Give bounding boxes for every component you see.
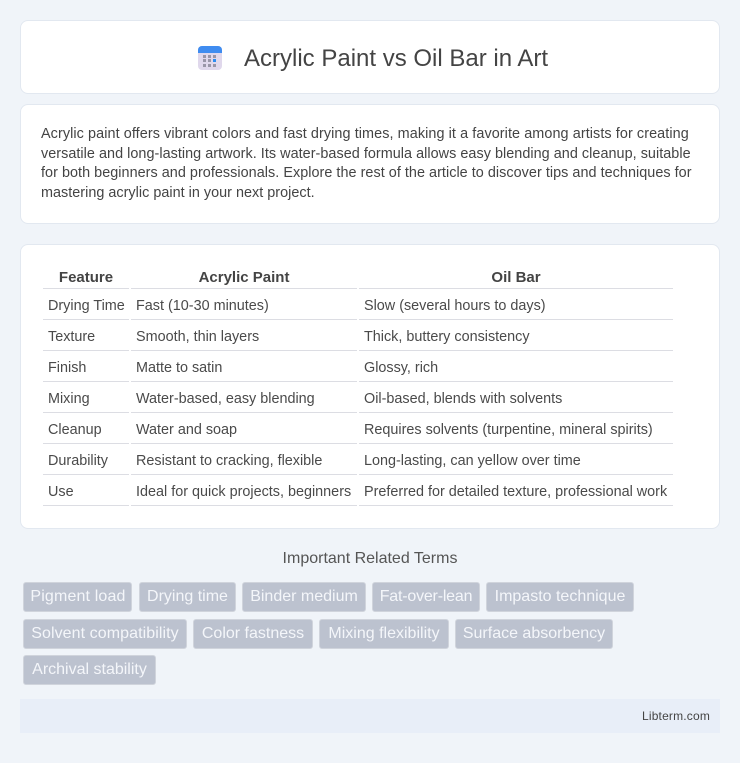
comparison table: Thick, buttery consistency xyxy=(364,329,530,345)
related terms tags: Drying time xyxy=(147,588,228,605)
comparison table: Use xyxy=(48,484,74,500)
intro text: Acrylic paint offers vibrant colors and fast drying times, making it a favorite among artists for creating xyxy=(41,126,689,142)
comparison table: Fast (10-30 minutes) xyxy=(136,298,269,314)
comparison table: Slow (several hours to days) xyxy=(364,298,546,314)
comparison table: Oil-based, blends with solvents xyxy=(364,391,562,407)
comparison table: Mixing xyxy=(48,391,90,407)
title: Acrylic Paint vs Oil Bar in Art xyxy=(244,45,548,72)
intro text: mastering acrylic paint in your next project. xyxy=(41,185,315,201)
comparison table: Glossy, rich xyxy=(364,360,438,376)
icon: calendar xyxy=(198,46,222,70)
comparison table: Requires solvents (turpentine, mineral spirits) xyxy=(364,422,653,438)
intro text xyxy=(41,126,692,201)
comparison table: Long-lasting, can yellow over time xyxy=(364,453,581,469)
comparison table: Finish xyxy=(48,360,86,376)
intro paragraph card xyxy=(20,104,720,224)
header card xyxy=(20,20,720,94)
related terms tags: Archival stability xyxy=(32,661,147,678)
comparison table: Ideal for quick projects, beginners xyxy=(136,484,351,500)
related terms tags: Mixing flexibility xyxy=(328,625,440,642)
related terms tags: Pigment load xyxy=(30,588,126,605)
intro text: versatile and long-lasting artwork. Its water-based formula allows easy blending and cleanup, suitable xyxy=(41,146,691,162)
comparison table xyxy=(43,269,673,506)
related terms heading: Important Related Terms xyxy=(283,550,457,567)
related terms tags xyxy=(23,582,634,685)
comparison table: Smooth, thin layers xyxy=(136,329,259,345)
comparison table: Texture xyxy=(48,329,95,345)
comparison table: Acrylic Paint xyxy=(199,269,289,286)
related terms tags: Solvent compatibility xyxy=(31,625,179,642)
related terms tags: Fat-over-lean xyxy=(380,588,472,605)
related terms tags: Color fastness xyxy=(202,625,304,642)
comparison table: Feature xyxy=(59,269,113,286)
comparison table: Cleanup xyxy=(48,422,102,438)
comparison table: Water-based, easy blending xyxy=(136,391,315,407)
related terms tags: Binder medium xyxy=(250,588,358,605)
comparison table: Oil Bar xyxy=(491,269,541,286)
comparison table: Water and soap xyxy=(136,422,237,438)
comparison table: Matte to satin xyxy=(136,360,222,376)
footer bar xyxy=(20,699,720,733)
comparison table: Resistant to cracking, flexible xyxy=(136,453,322,469)
comparison table: Drying Time xyxy=(48,298,125,314)
comparison table: Preferred for detailed texture, professional work xyxy=(364,484,667,500)
related terms tags: Surface absorbency xyxy=(463,625,605,642)
intro text: for both beginners and professionals. Explore the rest of the article to discover tips and techniques for xyxy=(41,165,692,181)
footer credit: Libterm.com xyxy=(642,709,710,723)
comparison table: Durability xyxy=(48,453,108,469)
related terms tags: Impasto technique xyxy=(495,588,625,605)
comparison table card xyxy=(20,244,720,529)
